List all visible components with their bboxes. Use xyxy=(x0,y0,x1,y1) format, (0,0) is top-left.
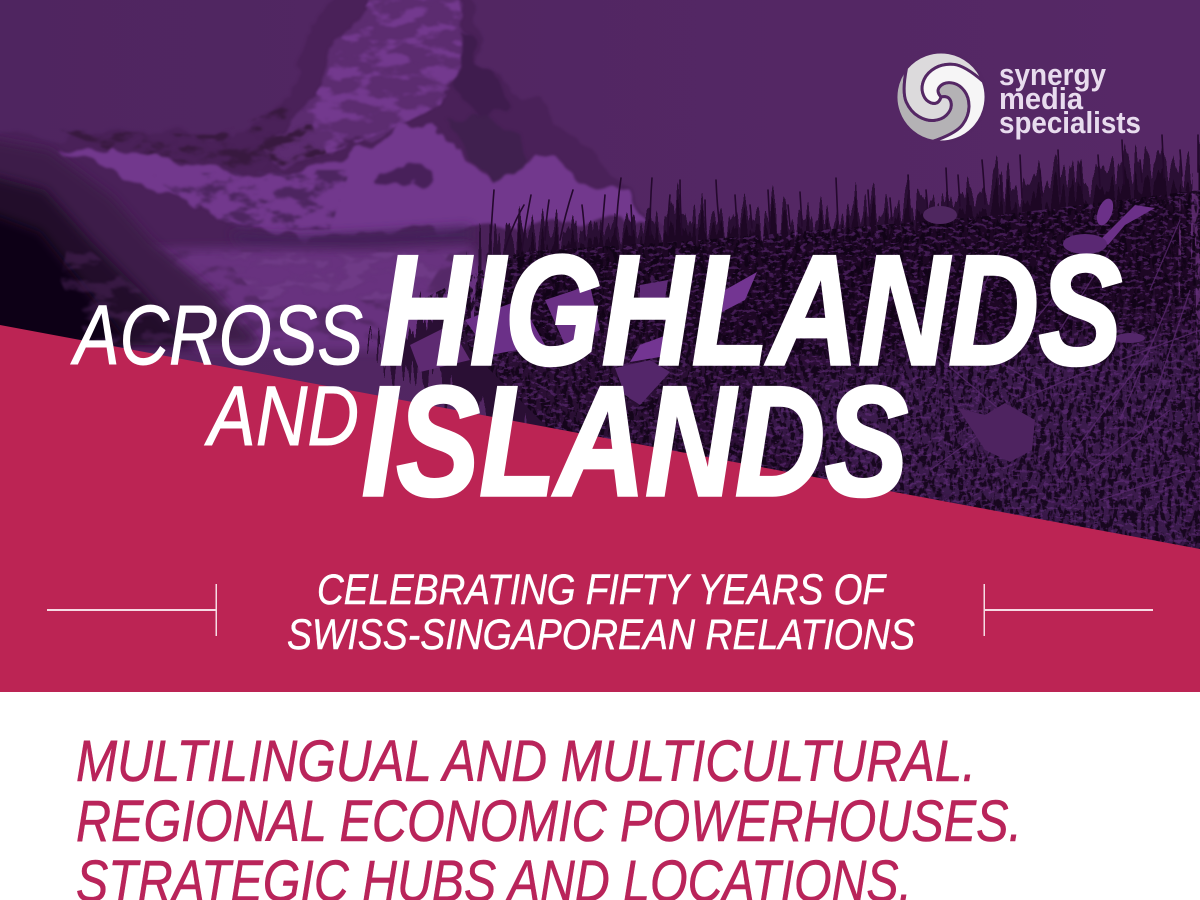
flower top right xyxy=(1063,196,1155,254)
subtitle: CELEBRATING FIFTY YEARS OF xyxy=(317,566,887,614)
flower near ISLANDS xyxy=(615,360,670,405)
title: Across Highlands and Islands: ISLANDS xyxy=(362,355,908,529)
subtitle xyxy=(287,566,915,659)
logo wordmark: synergy xyxy=(999,57,1107,92)
small blossoms xyxy=(923,206,957,224)
white lower panel xyxy=(0,692,1200,900)
crimson diagonal banner xyxy=(0,325,1200,692)
logo wordmark: media xyxy=(999,81,1084,116)
mountain massif xyxy=(0,0,660,340)
flowers behind title xyxy=(410,272,757,372)
sky xyxy=(0,0,1200,560)
title: Across Highlands and Islands: AND xyxy=(204,369,359,463)
hero photo: mountain and meadow duotone xyxy=(0,0,1200,600)
logo wordmark: specialists xyxy=(999,105,1141,140)
dark foreground hill xyxy=(0,130,260,345)
right subtitle rule xyxy=(984,584,1153,636)
meadow ground xyxy=(378,155,1200,600)
intro statement xyxy=(76,729,1022,900)
title: Across Highlands and Islands xyxy=(70,224,1122,529)
flowers xyxy=(410,196,1155,462)
dark band and lower slopes xyxy=(120,226,520,350)
large tulip xyxy=(958,403,1035,462)
meadow texture strokes xyxy=(930,220,1200,500)
subtitle: SWISS-SINGAPOREAN RELATIONS xyxy=(287,611,915,659)
logo swirl icon xyxy=(879,25,1012,165)
logo: synergy media specialists xyxy=(879,25,1141,165)
intro statement: MULTILINGUAL AND MULTICULTURAL. xyxy=(76,729,976,794)
logo wordmark xyxy=(999,57,1141,140)
snowfield xyxy=(58,125,650,236)
intro statement: REGIONAL ECONOMIC POWERHOUSES. xyxy=(76,789,1022,854)
title: Across Highlands and Islands: ACROSS xyxy=(70,288,363,382)
left subtitle rule xyxy=(47,584,217,636)
grass blades along the meadow edge xyxy=(490,135,1198,250)
